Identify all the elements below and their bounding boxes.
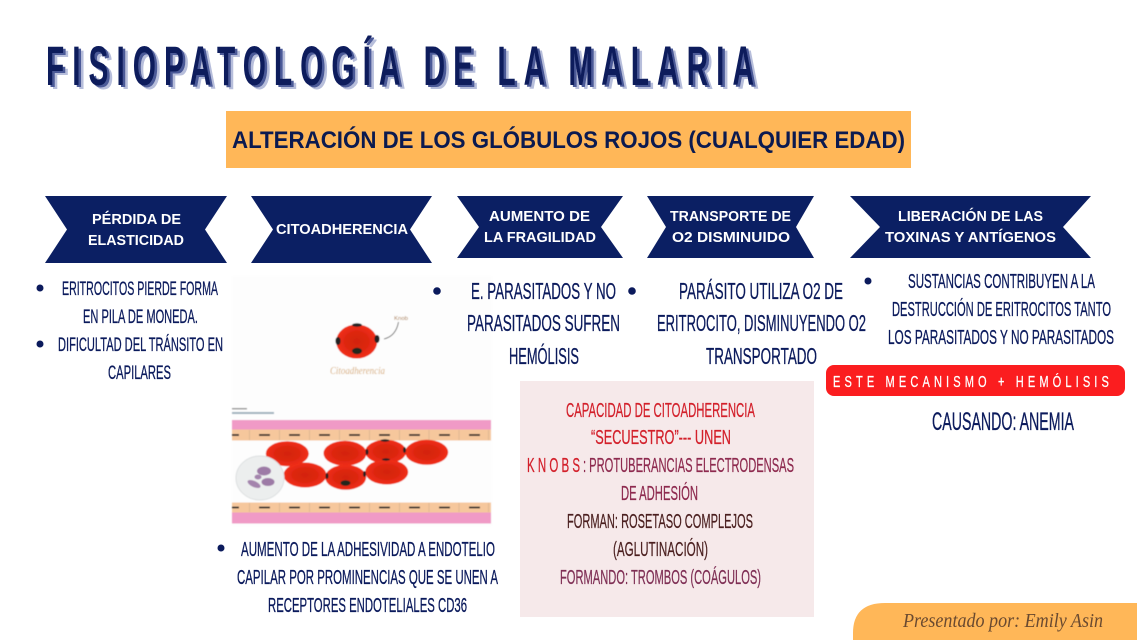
subtitle banner <box>226 111 911 168</box>
text block: adhesividad <box>218 538 498 617</box>
icon: parasitized red cell with knob <box>330 316 408 377</box>
panel: citoadherencia details: “SECUESTRO”--- UNEN <box>591 426 731 449</box>
ribbon: pérdida de elasticidad: PÉRDIDA DE <box>92 211 181 228</box>
text block: transporte de oxígeno <box>657 278 866 369</box>
text block: eritrocitos: CAPILARES <box>108 363 171 384</box>
text block: eritrocitos: EN PILA DE MONEDA. <box>83 307 198 328</box>
text block: eritrocitos: DIFICULTAD DEL TRÁNSITO EN <box>58 335 223 356</box>
ribbon: citoadherencia: CITOADHERENCIA <box>276 222 409 238</box>
ribbon: liberación de las toxinas y antígenos: LIBERACIÓN DE LAS <box>898 207 1043 225</box>
vessel wall: top <box>232 420 491 440</box>
ribbon: aumento de la fragilidad: LA FRAGILIDAD <box>484 230 596 246</box>
panel: citoadherencia details: : PROTUBERANCIAS ELECTRODENSAS <box>583 454 794 477</box>
text block: eritrocitos: ERITROCITOS PIERDE FORMA <box>62 279 218 300</box>
ribbon: pérdida de elasticidad <box>45 196 227 263</box>
ribbon: liberación de las toxinas y antígenos <box>850 196 1091 258</box>
ribbon: liberación de las toxinas y antígenos: TOXINAS Y ANTÍGENOS <box>885 229 1056 246</box>
footer: presenter <box>853 603 1137 640</box>
red blood cells <box>266 439 448 490</box>
text block: eritrocitos <box>36 279 223 384</box>
text block: adhesividad: RECEPTORES ENDOTELIALES CD36 <box>268 594 467 617</box>
ribbon: pérdida de elasticidad: ELASTICIDAD <box>88 233 184 249</box>
vessel wall: bottom <box>232 502 491 524</box>
ribbon: citoadherencia <box>251 196 432 263</box>
callout: este mecanismo <box>826 365 1125 396</box>
ribbon: transporte de O2 disminuido: TRANSPORTE DE <box>670 209 791 225</box>
ribbon: aumento de la fragilidad <box>457 196 623 258</box>
icon: parasitized red cell with knob: Knob <box>394 316 408 322</box>
white blood cell <box>236 456 284 500</box>
footer: presenter: Presentado por: Emily Asin <box>902 610 1103 632</box>
illustration: citoadherencia <box>232 276 492 526</box>
text block: fragilidad: PARASITADOS SUFREN <box>467 310 620 336</box>
text block: fragilidad: E. PARASITADOS Y NO <box>471 278 616 304</box>
text block: adhesividad: CAPILAR POR PROMINENCIAS QUE SE UNEN A <box>237 566 498 589</box>
text block: transporte de oxígeno: ERITROCITO, DISMINUYENDO O2 <box>657 310 866 336</box>
icon: parasitized red cell with knob: Citoadherencia <box>330 366 385 377</box>
text block: fragilidad <box>433 278 636 369</box>
panel: citoadherencia details: (AGLUTINACIÓN) <box>613 538 708 561</box>
ribbon: transporte de O2 disminuido <box>647 196 814 258</box>
panel: citoadherencia details: CAPACIDAD DE CITOADHERENCIA <box>566 399 755 422</box>
panel: citoadherencia details: K N O B S <box>527 454 580 477</box>
subtitle banner: ALTERACIÓN DE LOS GLÓBULOS ROJOS (CUALQUIER EDAD) <box>232 126 905 154</box>
text block: fragilidad: HEMÓLISIS <box>509 343 579 369</box>
panel: citoadherencia details: FORMAN: ROSETASO COMPLEJOS <box>567 510 753 533</box>
panel: citoadherencia details <box>520 381 814 617</box>
ribbon: transporte de O2 disminuido: O2 DISMINUIDO <box>672 230 790 246</box>
text block: toxinas <box>864 270 1114 349</box>
text block: adhesividad: AUMENTO DE LA ADHESIVIDAD A ENDOTELIO <box>241 538 495 561</box>
text block: transporte de oxígeno: TRANSPORTADO <box>706 343 817 369</box>
panel: citoadherencia details: DE ADHESIÓN <box>621 482 698 505</box>
text block: transporte de oxígeno: PARÁSITO UTILIZA O2 DE <box>679 278 843 304</box>
ribbon: aumento de la fragilidad: AUMENTO DE <box>489 209 590 225</box>
panel: citoadherencia details: FORMANDO: TROMBOS (COÁGULOS) <box>560 566 761 589</box>
